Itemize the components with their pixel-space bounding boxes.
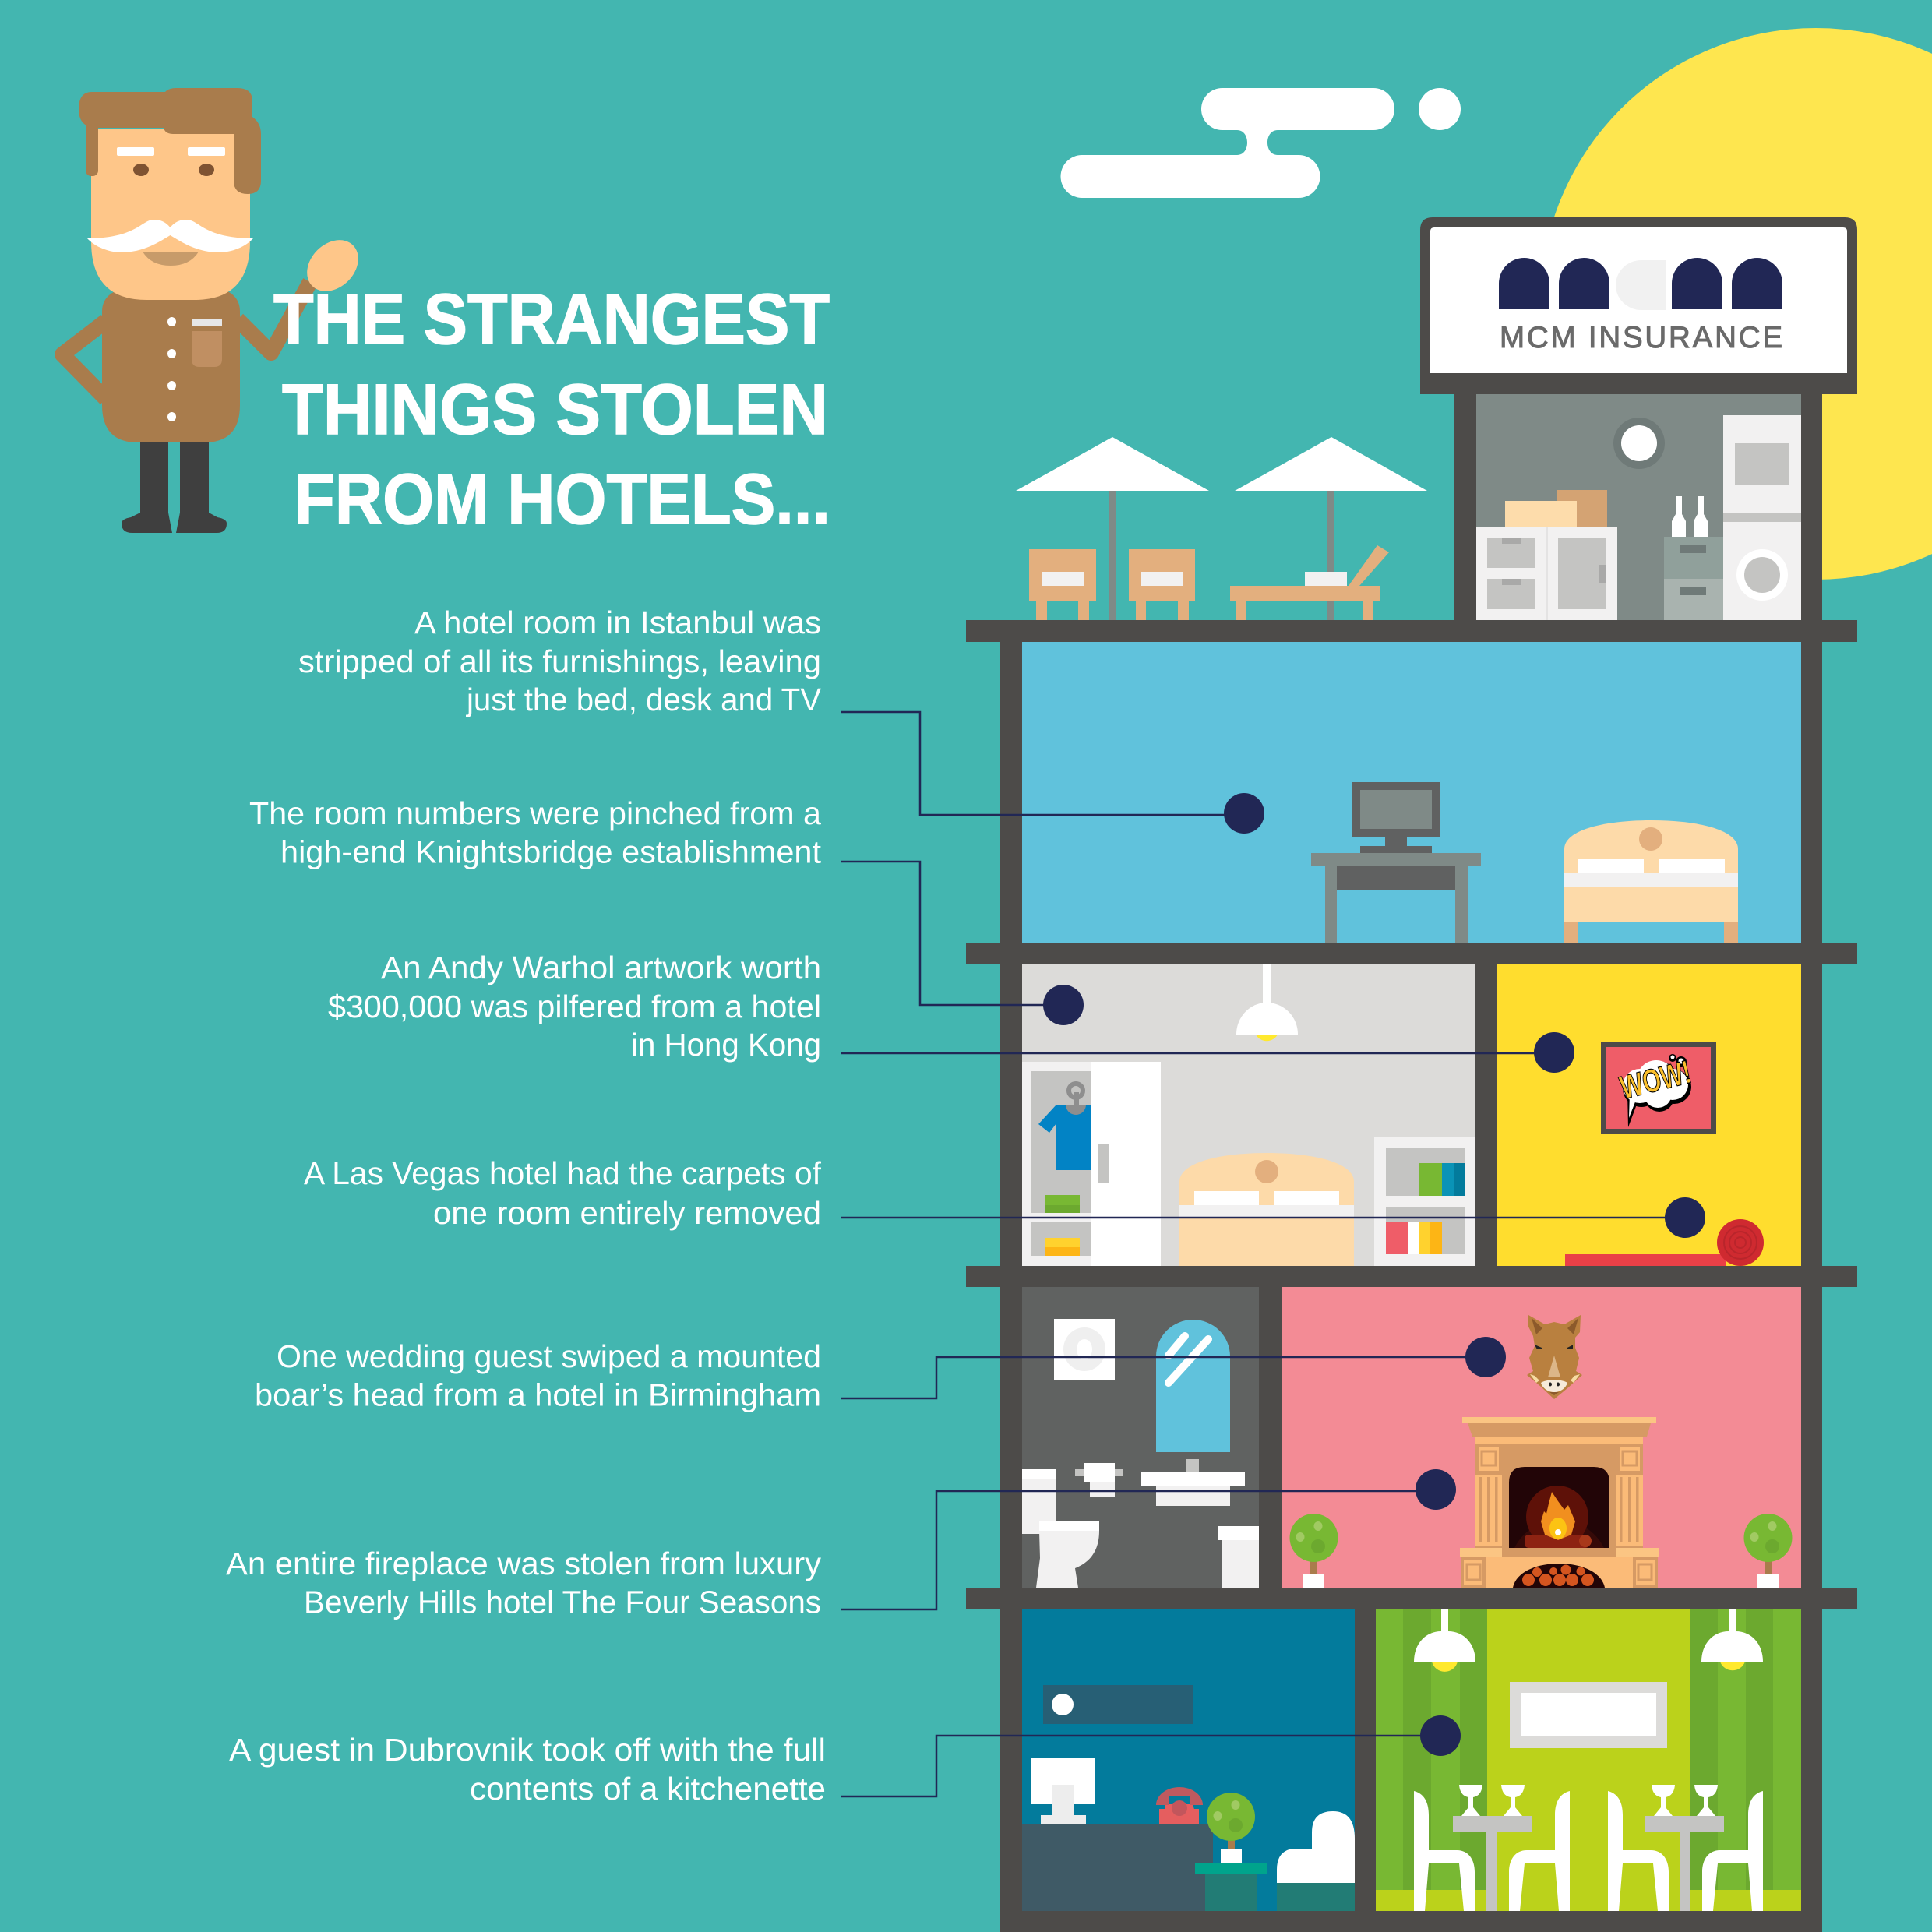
leader line: room numbers	[841, 862, 1048, 1005]
sun lounger	[1230, 545, 1389, 620]
dining set right	[1608, 1785, 1763, 1911]
kitchen cabinet	[1476, 527, 1617, 620]
title	[273, 280, 830, 539]
telephone	[1156, 1787, 1203, 1824]
text: Knightsbridge	[249, 795, 822, 869]
toilet	[1022, 1469, 1099, 1588]
mantel	[1462, 1417, 1656, 1444]
text: Warhol: in Hong Kong	[631, 1027, 821, 1063]
text: Las Vegas	[304, 1155, 822, 1231]
marker: Warhol	[1534, 1032, 1574, 1073]
name tag and pocket	[192, 319, 222, 367]
marker: boar head	[1465, 1337, 1506, 1377]
buttons	[167, 317, 176, 421]
hanger	[1069, 1084, 1083, 1108]
parasol right	[1235, 437, 1427, 620]
bed	[1564, 820, 1738, 943]
fire opening	[1509, 1467, 1609, 1548]
leader line: fireplace	[841, 1491, 1422, 1609]
ceiling lamp	[1236, 964, 1298, 1041]
pendant lamp left	[1414, 1609, 1475, 1672]
room: bathroom	[1022, 1287, 1259, 1588]
text: Beverly Hills: Beverly Hills hotel The Four Seasons	[304, 1585, 821, 1620]
plant right	[1743, 1514, 1792, 1588]
room: bedroom	[1022, 964, 1475, 1266]
bellhop character	[62, 88, 368, 533]
computer monitor	[1352, 782, 1440, 853]
marker: kitchenette	[1420, 1715, 1461, 1756]
rolled up carpet	[1565, 1219, 1764, 1266]
moustache	[87, 220, 253, 252]
text: Las Vegas: one room entirely removed	[433, 1195, 821, 1231]
rooftop terrace	[1016, 437, 1427, 620]
hearth base	[1460, 1548, 1659, 1588]
chair right	[1129, 549, 1195, 620]
table lamp	[1031, 1758, 1095, 1824]
fireplace	[1460, 1417, 1659, 1588]
wow speech bubble	[1616, 1053, 1694, 1127]
text: Beverly Hills	[226, 1546, 822, 1620]
rooftop sign	[1420, 217, 1857, 394]
pendant lamp right	[1701, 1609, 1763, 1670]
upper panels	[1479, 1447, 1640, 1471]
room: restaurant	[1376, 1609, 1801, 1911]
leader line: Warhol	[841, 1052, 1539, 1054]
dining set left	[1414, 1785, 1570, 1911]
leader line: Istanbul	[841, 712, 1227, 815]
marker: fireplace	[1416, 1469, 1456, 1510]
right column	[1616, 1475, 1643, 1546]
face	[91, 129, 250, 300]
parasol left	[1016, 437, 1209, 620]
text: Istanbul: just the bed, desk and TV	[466, 682, 822, 717]
desk	[1022, 1824, 1213, 1911]
log store	[1513, 1564, 1605, 1588]
bed	[1179, 1153, 1354, 1266]
text: Warhol: An Andy Warhol artwork worth	[381, 950, 821, 985]
text: Dubrovnik	[229, 1732, 826, 1807]
left arm	[62, 321, 106, 399]
text: Istanbul: stripped of all its furnishings, leaving	[298, 643, 821, 679]
room: pink lounge	[1282, 1287, 1801, 1588]
text: Dubrovnik: contents of a kitchenette	[470, 1771, 826, 1807]
text: Istanbul	[298, 605, 822, 717]
flame	[1541, 1492, 1575, 1540]
text: Las Vegas: A Las Vegas hotel had the carpets of	[304, 1155, 822, 1191]
folded yellow towel	[1045, 1238, 1080, 1256]
leader line: boar head	[841, 1357, 1468, 1398]
cloud	[1061, 88, 1461, 198]
wall stripes	[1403, 1609, 1773, 1890]
text: Birmingham: One wedding guest swiped a mounted	[277, 1338, 821, 1374]
text: Knightsbridge: The room numbers were pinched from a	[249, 795, 821, 831]
text: Knightsbridge: high-end Knightsbridge establishment	[280, 834, 822, 869]
room: kitchenette roof level	[1476, 394, 1801, 620]
chair left	[1029, 549, 1096, 620]
boxes	[1505, 490, 1607, 527]
hair	[79, 88, 261, 194]
sun	[1540, 28, 1932, 580]
title: FROM HOTELS...	[294, 460, 830, 539]
room: hotel room with desk	[1022, 1609, 1355, 1911]
marker: room numbers	[1043, 985, 1084, 1025]
text: Dubrovnik: A guest in Dubrovnik took off with the full	[229, 1732, 826, 1768]
drawer unit	[1664, 537, 1723, 620]
sink	[1141, 1459, 1245, 1506]
bathroom bin	[1218, 1526, 1259, 1588]
mouth	[143, 252, 199, 266]
toilet roll	[1075, 1463, 1123, 1497]
text: Beverly Hills: An entire fireplace was stolen from luxury	[226, 1546, 822, 1581]
blue shirt	[1038, 1105, 1091, 1170]
text: Birmingham: boar’s head from a hotel in Birmingham	[255, 1377, 821, 1413]
text: Warhol	[328, 950, 821, 1063]
leader line: kitchenette	[841, 1736, 1426, 1796]
wall panel	[1043, 1685, 1193, 1724]
left column	[1475, 1475, 1502, 1546]
sign text: MCM INSURANCE	[1500, 321, 1782, 354]
text: Warhol: $300,000 was pilfered from a hotel	[328, 989, 821, 1024]
bookshelf	[1374, 1137, 1475, 1266]
wall clock	[1613, 418, 1665, 469]
room: art room	[1497, 964, 1801, 1266]
side table and plant	[1195, 1793, 1267, 1911]
marker: furnishings	[1224, 793, 1264, 834]
fridge and washing machine	[1723, 415, 1801, 620]
right arm and hand	[238, 230, 368, 353]
boar head	[1527, 1315, 1582, 1399]
folded green towel	[1045, 1195, 1080, 1213]
title: THINGS STOLEN	[282, 370, 828, 450]
eyes	[133, 164, 214, 176]
marker: carpets	[1665, 1197, 1705, 1238]
legs and shoes	[122, 440, 227, 533]
mirror	[1156, 1320, 1230, 1452]
building structure	[966, 394, 1857, 1932]
wall speaker panel	[1054, 1319, 1115, 1380]
plant left	[1290, 1514, 1338, 1588]
eyebrows	[117, 147, 225, 156]
title: THE STRANGEST	[273, 280, 830, 359]
jacket	[102, 290, 240, 442]
armchair	[1277, 1811, 1355, 1911]
wall picture	[1510, 1682, 1667, 1748]
room: top floor study	[1022, 642, 1801, 943]
text: Istanbul: A hotel room in Istanbul was	[414, 605, 821, 640]
framed wow artwork	[1601, 1042, 1716, 1134]
wine bottles	[1672, 496, 1708, 537]
wow lettering: WOW!	[1616, 1053, 1694, 1106]
wardrobe	[1022, 1062, 1161, 1266]
text: Birmingham	[255, 1338, 821, 1413]
leader line: carpets	[841, 1217, 1671, 1218]
logo arches	[1499, 258, 1782, 310]
desk	[1311, 853, 1481, 943]
